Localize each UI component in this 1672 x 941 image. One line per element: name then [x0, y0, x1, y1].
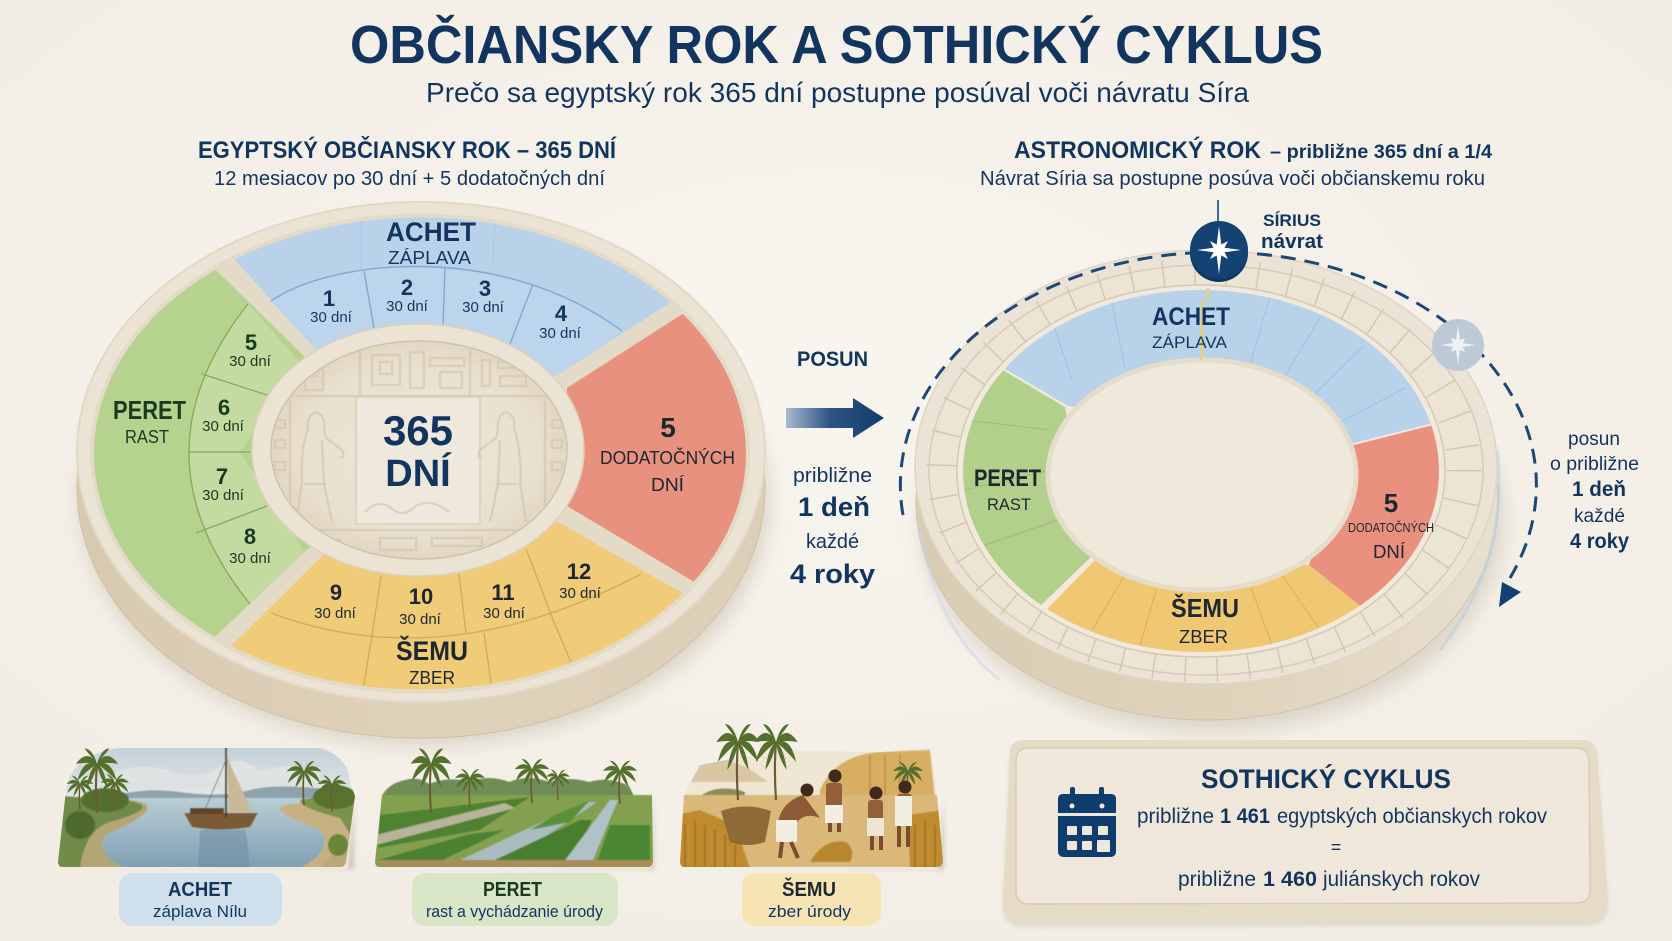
labels: peret [113, 330, 272, 567]
arrow: shift [786, 398, 884, 438]
line: egyptian years: 1 461 [1220, 805, 1270, 828]
callout: shift by one day: posun [1568, 429, 1620, 450]
line: egyptian years: približne [1137, 805, 1214, 828]
labels: ring: ACHET [1152, 303, 1230, 331]
label: semu harvest: ŠEMU [782, 877, 836, 901]
panel: sothic cycle [1003, 740, 1608, 927]
label: sirius return: návrat [1261, 231, 1323, 253]
labels: semu: ZBER [409, 668, 455, 688]
heading: astronomical year: Návrat Síria sa postupne posúva voči občianskemu roku [980, 168, 1485, 190]
labels: peret: 8 [244, 524, 256, 549]
title: OBČIANSKY ROK A SOTHICKÝ CYKLUS [350, 14, 1323, 75]
callout: shift: približne [793, 465, 872, 487]
heading: astronomical year: ASTRONOMICKÝ ROK [1014, 136, 1262, 164]
labels: peret: 6 [218, 395, 230, 420]
label: achet flood: záplava Nílu [153, 902, 247, 921]
callout: shift by one day [1550, 429, 1639, 553]
sector: extra days red [1309, 426, 1439, 606]
sector: peret green [963, 370, 1090, 605]
labels: peret: PERET [113, 395, 186, 425]
labels: achet: 30 dní [386, 298, 429, 315]
marker line to achet [1201, 288, 1208, 360]
icon: calendar [1058, 787, 1116, 857]
labels: extra days: DODATOČNÝCH [600, 447, 735, 468]
arrow: dashed sirius orbit [900, 252, 1536, 607]
sector: peret green [94, 270, 310, 637]
illustration: peret growing fields [370, 748, 660, 870]
labels: semu: 30 dní [314, 605, 357, 622]
icon: sirius star [1190, 200, 1248, 282]
labels: ring: DNÍ [1373, 542, 1405, 562]
label: sirius return: SÍRIUS [1263, 211, 1321, 230]
label: achet flood: ACHET [168, 879, 232, 901]
labels: peret: 30 dní [202, 418, 245, 435]
labels: achet: ZÁPLAVA [388, 248, 471, 268]
labels: extra days [600, 412, 735, 495]
sector: extra days red [567, 314, 746, 582]
labels: achet: 30 dní [539, 325, 582, 342]
tick marks [944, 275, 1464, 665]
callout: shift by one day: o približne [1550, 454, 1639, 475]
heading: astronomical year [980, 136, 1492, 190]
labels: peret: 7 [216, 464, 228, 489]
sector: achet blue [234, 218, 670, 376]
labels: ring: DODATOČNÝCH [1348, 520, 1434, 535]
labels: ring: ZBER [1179, 627, 1228, 647]
labels: achet [310, 217, 582, 342]
callout: shift: POSUN [797, 348, 868, 371]
labels: achet: 4 [555, 301, 568, 326]
callout: shift by one day: 4 roky [1570, 530, 1629, 553]
labels: ring: PERET [974, 465, 1041, 492]
heading: astronomical year: – približne 365 dní a 1/4 [1270, 142, 1492, 163]
label: achet flood [119, 873, 282, 926]
labels: semu: 10 [409, 584, 433, 609]
label: 365 days [383, 407, 453, 495]
callout: shift [786, 348, 884, 589]
labels: achet: ACHET [386, 217, 476, 247]
labels: peret: 5 [245, 330, 257, 355]
label: sirius return [1261, 211, 1323, 253]
subtitle: Prečo sa egyptský rok 365 dní postupne posúval voči návratu Síra [426, 77, 1249, 108]
labels: ring: RAST [987, 495, 1031, 514]
label: semu harvest [742, 873, 881, 926]
labels: achet: 2 [401, 275, 413, 300]
line: julian years: 1 460 [1263, 868, 1317, 891]
label: 365 days: DNÍ [385, 451, 452, 495]
line: julian years [1178, 868, 1480, 891]
label: peret growth: rast a vychádzanie úrody [426, 902, 603, 921]
labels: semu: 30 dní [483, 605, 526, 622]
labels: semu: 9 [330, 580, 342, 605]
line: julian years: približne [1178, 868, 1256, 891]
callout: shift by one day: 1 deň [1572, 478, 1626, 501]
labels: achet: 30 dní [462, 299, 505, 316]
labels: ring: ZÁPLAVA [1152, 333, 1228, 352]
labels: peret: RAST [125, 427, 169, 447]
labels: semu [314, 559, 602, 688]
line: julian years: juliánskych rokov [1322, 868, 1480, 891]
center plain stone [1048, 360, 1356, 590]
equals sign: = [1331, 837, 1341, 857]
illustration: achet nile flood [50, 740, 360, 870]
labels: ring: ŠEMU [1171, 593, 1239, 623]
sector: semu yellow [231, 522, 683, 690]
labels: semu: 30 dní [559, 585, 602, 602]
sector: achet blue [1004, 290, 1430, 444]
line: egyptian years [1137, 805, 1547, 828]
callout: shift: 1 deň [798, 492, 870, 522]
label: peret growth: PERET [483, 879, 542, 901]
labels: semu: 12 [567, 559, 591, 584]
heading: egyptian civil year: EGYPTSKÝ OBČIANSKY ROK – 365 DNÍ [198, 136, 617, 164]
labels: extra days: 5 [660, 412, 676, 443]
basket [721, 806, 771, 845]
labels: semu: 30 dní [399, 611, 442, 628]
labels: achet: 30 dní [310, 309, 353, 326]
sector: semu yellow [1047, 560, 1360, 652]
panel: civil year stone disc [74, 201, 776, 751]
labels: peret: 30 dní [202, 487, 245, 504]
heading: egyptian civil year [198, 136, 617, 190]
callout: shift by one day: každé [1574, 506, 1625, 527]
callout: shift: každé [806, 531, 859, 553]
panel title: SOTHICKÝ CYKLUS [1201, 763, 1451, 794]
labels: ring: 5 [1384, 488, 1398, 518]
labels: ring [974, 303, 1434, 647]
medallion: 365 days relief [252, 324, 584, 576]
labels: extra days: DNÍ [651, 475, 684, 495]
label: semu harvest: zber úrody [768, 902, 852, 921]
illustration: semu harvest [675, 724, 950, 870]
labels: peret: 30 dní [229, 550, 272, 567]
label: 365 days: 365 [383, 407, 453, 454]
line: egyptian years: egyptských občianskych rokov [1277, 805, 1547, 828]
label: peret growth [412, 873, 618, 926]
labels: achet: 1 [323, 286, 335, 311]
icon: shifted sirius [1432, 319, 1484, 371]
heading: egyptian civil year: 12 mesiacov po 30 dní + 5 dodatočných dní [214, 168, 605, 190]
harvesters [776, 770, 912, 858]
labels: achet: 3 [479, 276, 491, 301]
labels: peret: 30 dní [229, 353, 272, 370]
labels: semu: ŠEMU [396, 635, 468, 666]
labels: semu: 11 [491, 580, 515, 605]
callout: shift: 4 roky [790, 559, 875, 589]
panel: astronomical year stone disc [914, 250, 1510, 738]
